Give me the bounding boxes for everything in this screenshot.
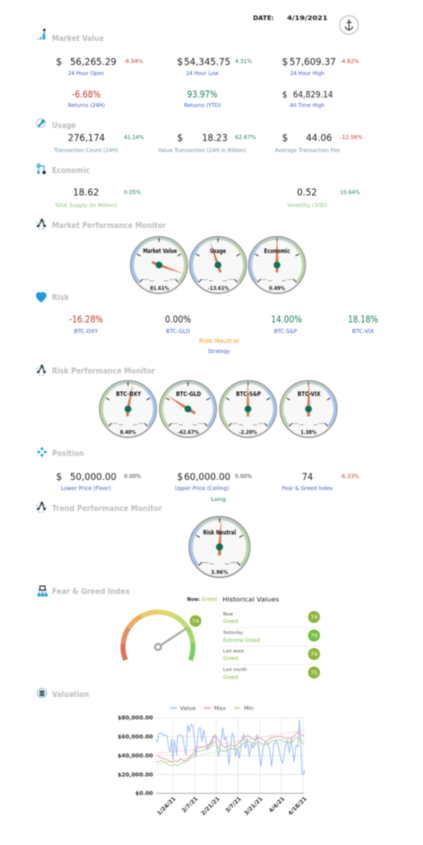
gauge: btc-gld [160,381,216,437]
gauge: economic: 0.49% [269,286,285,292]
metric: btc-vix: BTC-VIX [352,329,374,335]
panel: position [37,447,359,503]
metric: fear and greed: 74 [302,472,313,483]
row: now [223,611,320,625]
metric: average transaction fee [275,133,363,154]
metric: btc-gld: BTC-GLD [166,329,190,335]
gauge: usage [190,237,246,293]
gauge: risk neutral: 3.96% [211,570,228,576]
chart legend: Max [214,706,227,712]
heading: Position [52,449,84,458]
metric: upper price: 60,000.00 [184,472,230,483]
chart legend: Min [244,706,254,712]
metric: transaction count: 41.14% [124,135,144,141]
gauge: btc-dxy: BTC-DXY [116,391,142,398]
row: last week [223,648,320,662]
metric: lower price: 50,000.00 [70,472,116,483]
gauge: risk neutral: Risk Neutral [203,530,236,536]
metric: fear and greed [282,472,359,492]
row: last month: 75 [310,670,318,676]
metric: 24 hour low [177,57,252,77]
strategy label [199,338,239,355]
x axis labels: 2/21/21 [201,796,221,817]
icon: heart [36,292,46,302]
metric: value transaction: Value Transaction (24H in Billion) [158,148,246,154]
gauge: fear and greed [123,612,201,660]
metric: average transaction fee: Average Transaction Fee [275,148,340,154]
x axis labels [157,796,308,817]
row: last month [223,666,320,681]
metric: returns ytd [184,89,221,109]
gauge: economic [249,236,305,293]
metric: 24 hour open: -6.94% [124,59,143,65]
icon: anchor logo [340,16,358,34]
metric: 24 hour low: 4.31% [235,59,252,65]
gauge: btc-s&p [220,381,276,437]
gauge: btc-dxy [100,381,156,437]
line chart [118,716,308,817]
metric: btc-dxy: -16.28% [69,314,103,325]
line chart: $0.00 [135,791,153,797]
metric: btc-vix: 18.18% [348,314,378,325]
gauge: market value [131,237,187,293]
icon: monitor nodes [36,219,46,230]
metric: lower price [56,472,141,492]
metric: volatility [287,187,360,209]
panel: risk [36,292,378,355]
historical values list: Historical Values [222,596,280,604]
metric: 24 hour open: $ [56,57,62,68]
metric: 24 hour open: 24 Hour Open [68,71,104,77]
metric: average transaction fee: -12.56% [340,135,363,141]
metric: upper price: $ [177,472,183,483]
metric: btc-dxy: BTC-DXY [74,329,99,335]
gauge: btc-gld: -42.67% [178,430,199,436]
date header: 4/19/2021 [287,16,328,22]
metric: btc-s&p: 14.00% [271,314,302,325]
x axis labels: 4/4/21 [268,796,286,814]
panel: economic [37,164,360,209]
icon: signal bars [38,29,46,40]
metric: btc-s&p: BTC-S&P [274,329,297,335]
metric: upper price: Upper Price (Ceiling) [175,486,229,492]
metric: total supply [54,187,141,209]
row: now: Greed [223,619,238,625]
gauge: fear and greed: 74 [192,619,199,625]
heading: Economic [52,166,90,175]
row: now: Now [223,612,233,618]
metric: value transaction [158,133,256,154]
date header [253,16,328,22]
heading: Market Value [52,34,104,43]
row: yesterday: 79 [310,634,318,640]
row: last week: 74 [310,652,318,658]
x axis labels: 4/18/21 [288,796,308,817]
icon: database [37,688,47,698]
metric: 24 hour high: -4.82% [340,59,359,65]
panel: valuation [37,688,308,817]
metric: volatility: 0.52 [297,187,317,198]
metric: lower price: Lower Price (Floor) [61,486,111,492]
metric: value transaction: 62.67% [235,135,256,141]
gauge: btc-vix: BTC-VIX [298,391,321,398]
gauge: btc-vix [280,381,337,437]
row: last week: Last week [223,648,244,654]
now status: Greed [202,597,217,603]
metric: all time high: $ [282,90,287,100]
heading: Fear & Greed Index [52,587,130,596]
panel: usage [37,119,363,154]
chart legend [170,706,254,712]
metric: all time high: All Time High [290,103,324,109]
metric: 24 hour low: 54,345.75 [184,57,230,68]
gauge: btc-vix: 1.38% [300,430,317,436]
metric: returns 24h: Returns (24H) [68,103,105,109]
x axis labels: 1/24/21 [157,796,177,817]
panel: trend performance monitor [36,502,250,577]
row: now: 74 [310,615,318,621]
row: last week: Greed [223,656,238,662]
gauge: btc-s&p: -2.20% [239,430,257,436]
metric: fear and greed: Fear & Greed Index [282,486,333,492]
metric: total supply: 0.05% [124,190,141,196]
icon: wrench [37,119,45,127]
metric: returns 24h: -6.68% [72,89,100,100]
icon: nodes [37,164,46,174]
now status: Now: [187,597,200,603]
line chart: $20,000.00 [118,772,153,778]
chart legend: Value [180,706,197,712]
metric: volatility: Volatility (30D) [287,203,327,209]
x axis labels: 2/7/21 [181,796,199,814]
gauge: btc-s&p: BTC-S&P [236,391,262,398]
gauge: risk neutral [189,517,250,577]
gauge: usage: Usage [210,248,226,255]
metric: 24 hour low: 24 Hour Low [186,71,219,77]
heading: Risk [52,293,70,302]
row: last month: Greed [223,675,238,681]
panel: market value [38,29,359,109]
heading: Valuation [52,690,89,699]
metric: btc-vix [348,314,378,335]
gauge: usage: -13.61% [208,286,229,292]
metric: volatility: 10.64% [340,190,360,196]
date header: DATE: [253,16,274,22]
metric: transaction count: 276,174 [68,133,105,144]
metric: btc-gld [165,314,191,335]
gauge: economic: Economic [264,248,290,255]
panel: risk performance monitor [36,365,337,437]
metric: btc-dxy [69,314,103,335]
metric: total supply: 18.62 [73,187,99,198]
metric: returns ytd: Returns (YTD) [184,103,221,109]
metric: value transaction: $ [177,133,183,144]
panel: fear and greed index [38,586,320,681]
metric: 24 hour open [56,57,143,77]
historical values list [222,596,320,681]
icon: monitor nodes [36,502,46,513]
metric: upper price: 0.00% [235,474,252,480]
row: last month: Last month [223,667,247,673]
metric: returns ytd: 93.97% [187,89,218,100]
x axis labels: 3/21/21 [244,796,264,817]
heading: Usage [52,121,76,130]
icon: monitor nodes [36,365,46,376]
strategy label: Strategy [208,349,230,355]
metric: btc-gld: 0.00% [165,314,191,325]
icon: four diamonds [37,447,47,457]
gauge: btc-gld: BTC-GLD [176,391,201,398]
metric: 24 hour high: $ [282,57,288,68]
gauge: btc-dxy: 8.40% [120,430,136,436]
metric: 24 hour high: 57,609.37 [290,57,336,68]
metric: average transaction fee: 44.06 [306,133,332,144]
metric: lower price: $ [56,472,62,483]
strategy label: Risk Neutral [199,338,239,345]
metric: btc-s&p [271,314,302,335]
metric: transaction count [53,133,144,154]
now status [187,597,217,603]
metric: all time high [282,90,333,109]
metric: average transaction fee: $ [282,133,288,144]
metric: lower price: 0.00% [124,474,141,480]
metric: all time high: 64,829.14 [293,90,333,100]
metric: 24 hour low: $ [177,57,183,68]
row: yesterday: Extreme Greed [223,638,260,644]
panel: market performance monitor [36,219,305,293]
icon: org chart [38,586,47,596]
metric: fear and greed: -6.33% [340,474,359,480]
metric: returns 24h [68,89,105,109]
metric: value transaction: 18.23 [202,133,228,144]
row: yesterday: Yesterday [222,630,243,636]
row: yesterday [222,630,320,644]
position label: Long [211,497,226,503]
heading: Risk Performance Monitor [52,367,155,376]
metric: 24 hour open: 56,265.29 [70,57,116,68]
gauge: market value: 81.61% [150,286,169,292]
line chart: $40,000.00 [118,753,153,759]
heading: Market Performance Monitor [52,221,166,230]
line chart: $80,000.00 [118,716,153,722]
metric: upper price [175,472,252,492]
metric: total supply: Total Supply (in Million) [54,203,117,209]
heading: Trend Performance Monitor [52,504,162,513]
gauge: market value: Market Value [143,248,177,255]
metric: transaction count: Transaction Count (24H) [53,148,118,154]
x axis labels: 3/7/21 [225,796,243,814]
metric: 24 hour high: 24 Hour High [290,71,324,77]
metric: 24 hour high [282,57,359,77]
line chart: $60,000.00 [118,734,153,740]
